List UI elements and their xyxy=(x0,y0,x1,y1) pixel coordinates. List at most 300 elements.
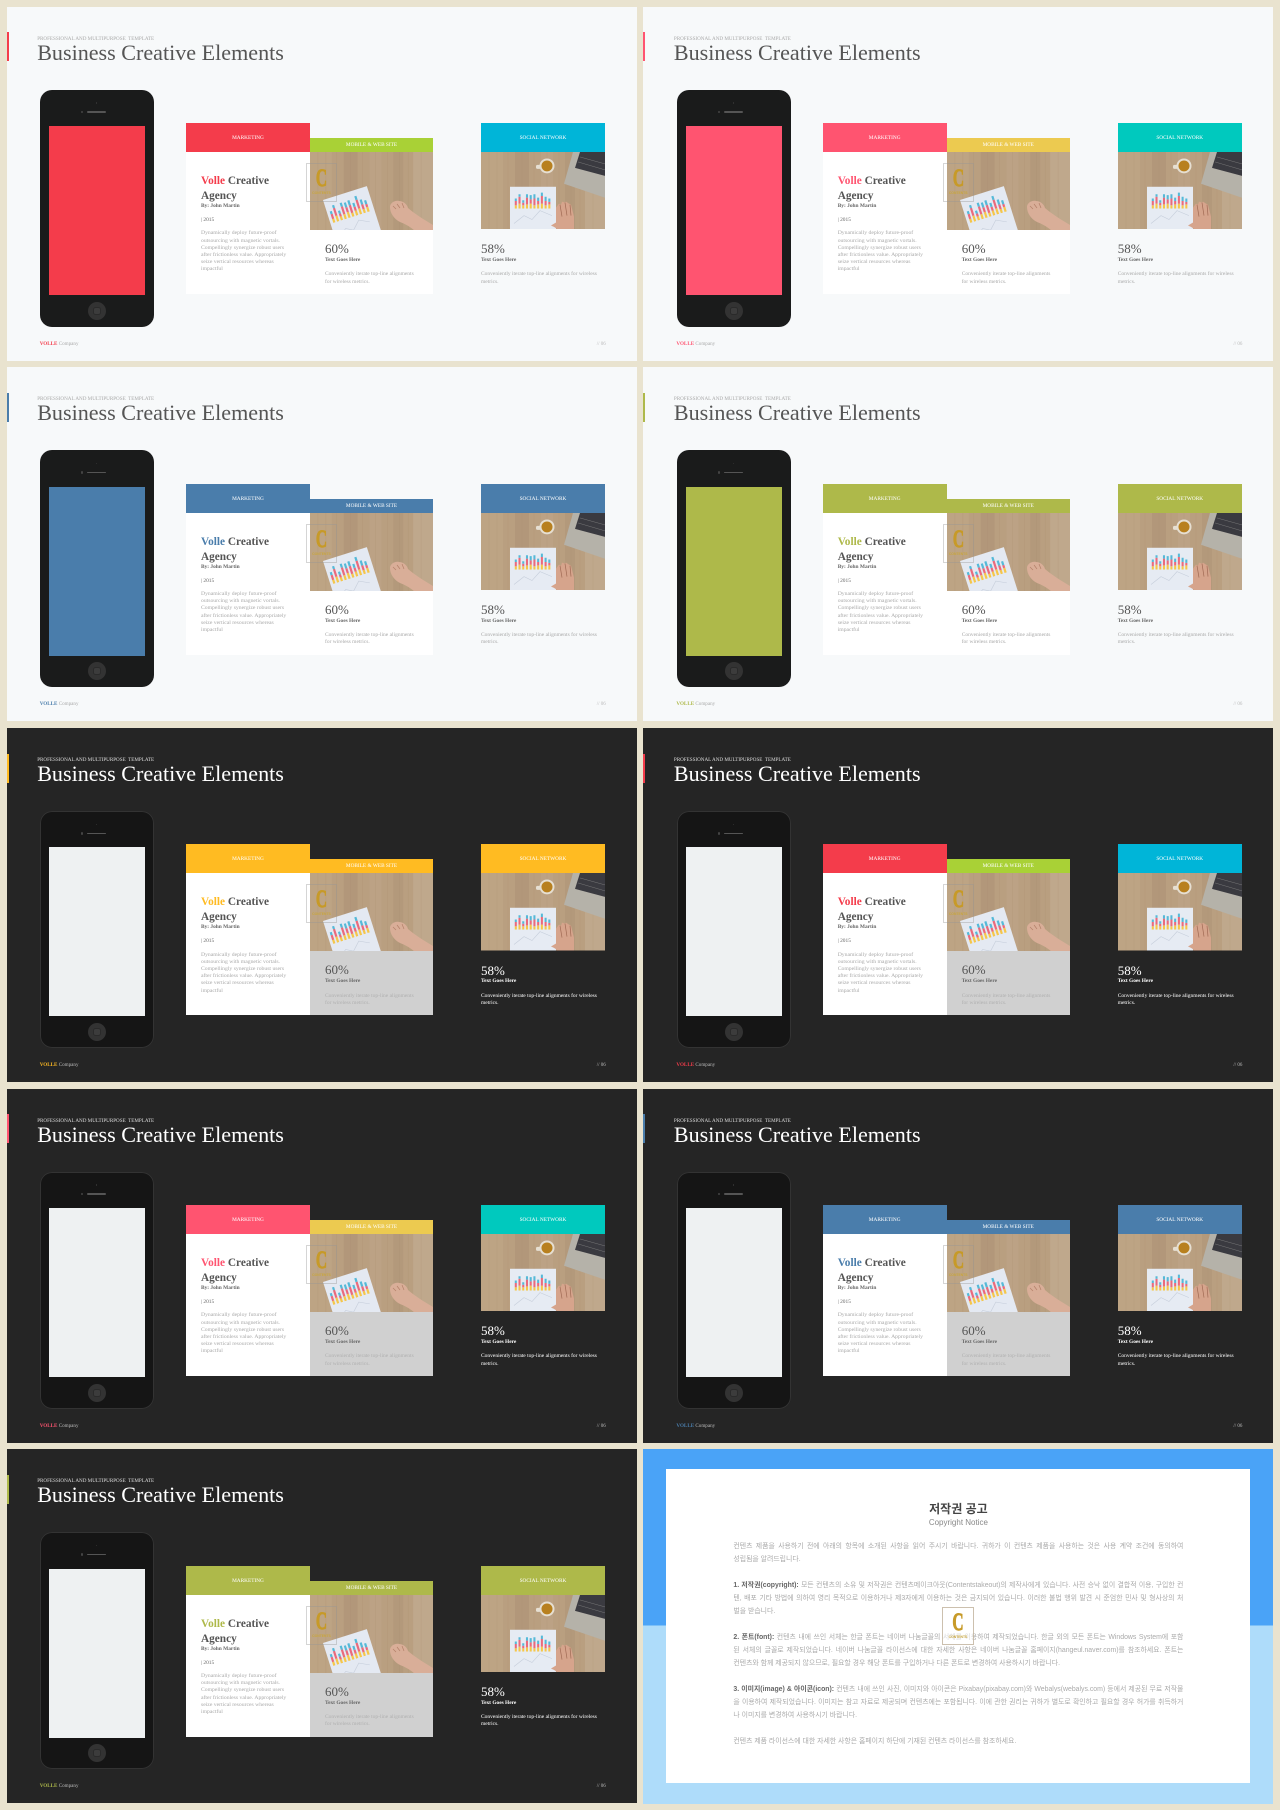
stat block xyxy=(947,951,1070,1015)
watermark logo: CONTENTS xyxy=(949,1635,967,1639)
body text: Dynamically deploy future-proof xyxy=(838,1312,913,1318)
card: social network xyxy=(481,484,605,645)
footer brand: VOLLE Company xyxy=(40,1423,79,1429)
accent bar xyxy=(7,1114,9,1143)
footer brand: VOLLE Company xyxy=(676,1423,715,1429)
panel: light slide pink xyxy=(643,7,1273,361)
photo: desk with chart xyxy=(310,873,433,951)
watermark logo: C xyxy=(953,165,964,192)
section 1: copyright: 텐, 배포 기타 방법에 의하여 영리 목적으로 이용하거나 제3자에게 이용하는 것은 금지되어 있습니다. 이러한 불법 행위 발견 시 준엄한 민사 및 형사상의 처 xyxy=(733,1595,1183,1602)
body text: after frictionless value. Appropriately xyxy=(838,613,923,619)
agency heading xyxy=(201,896,269,923)
accent bar xyxy=(7,393,9,422)
page number: // 06 xyxy=(597,1063,606,1068)
body text xyxy=(838,591,923,633)
card: agency and mobile xyxy=(823,844,1070,1015)
stat value: 60% xyxy=(962,1323,986,1338)
year: | 2015 xyxy=(838,1299,851,1305)
stat block xyxy=(310,591,433,655)
page number: // 06 xyxy=(1233,342,1242,347)
stat description: for wireless metrics. xyxy=(325,1721,370,1727)
tab: marketing xyxy=(823,844,947,873)
stat description: Conveniently iterate top-line alignments xyxy=(962,271,1050,277)
stat description: for wireless metrics. xyxy=(325,1000,370,1006)
watermark logo xyxy=(306,524,337,563)
body text xyxy=(201,591,286,633)
body text: after frictionless value. Appropriately xyxy=(838,973,923,979)
notice subtitle: Copyright Notice xyxy=(929,1518,988,1527)
stat description: for wireless metrics. xyxy=(962,1361,1006,1367)
stat value: 58% xyxy=(1118,1323,1142,1338)
body text: Compellingly synergize robust users xyxy=(201,245,284,251)
stat value: 58% xyxy=(481,241,505,256)
body text: after frictionless value. Appropriately xyxy=(201,252,286,258)
stat description xyxy=(481,1353,597,1368)
tab: social network: SOCIAL NETWORK xyxy=(1156,856,1203,862)
card: social network xyxy=(1118,123,1242,285)
tab: social network: SOCIAL NETWORK xyxy=(520,135,566,141)
heading: Business Creative Elements xyxy=(674,761,921,786)
tab: social network xyxy=(481,1566,605,1595)
watermark logo: CONTENTS xyxy=(312,552,331,556)
stat description xyxy=(481,993,597,1007)
stat description xyxy=(325,271,414,285)
stat value: 60% xyxy=(325,241,349,256)
watermark logo: CONTENTS xyxy=(312,912,331,916)
agency heading: Volle Creative xyxy=(201,1257,269,1269)
tab: social network xyxy=(481,123,605,152)
body text: impactful xyxy=(838,627,859,633)
photo: desk with chart xyxy=(310,152,433,230)
heading: Business Creative Elements xyxy=(37,400,284,425)
page number: // 06 xyxy=(597,702,606,707)
stat value: 58% xyxy=(1118,963,1142,978)
card background xyxy=(823,1234,1070,1376)
tab: social network xyxy=(1118,844,1242,873)
body text: Dynamically deploy future-proof xyxy=(838,230,913,236)
eyebrow text: PROFESSIONAL AND MULTIPURPOSE TEMPLATE xyxy=(37,1478,154,1484)
agency heading: Volle Creative xyxy=(201,896,269,908)
body text: seize vertical resources whereas xyxy=(838,620,910,626)
watermark logo: C xyxy=(953,886,964,913)
watermark logo xyxy=(943,1245,974,1284)
agency heading xyxy=(838,895,906,925)
tab: mobile and web site: MOBILE & WEB SITE xyxy=(983,863,1034,869)
card: social network xyxy=(481,1566,605,1731)
stat description: for wireless metrics. xyxy=(962,1000,1006,1006)
author: By: John Martin xyxy=(201,564,240,570)
page number: // 06 xyxy=(597,342,606,347)
panel: dark slide yellow xyxy=(7,728,637,1082)
body text: outsourcing with magnetic vortals. xyxy=(201,1320,280,1326)
phone mockup xyxy=(40,1532,154,1769)
panel: dark slide olive xyxy=(7,1449,637,1803)
stat description: Conveniently iterate top-line alignments xyxy=(325,1353,414,1359)
eyebrow text: PROFESSIONAL AND MULTIPURPOSE TEMPLATE xyxy=(674,1118,791,1124)
page number: // 06 xyxy=(1233,1063,1242,1068)
body text: outsourcing with magnetic vortals. xyxy=(838,598,917,604)
card: agency and mobile xyxy=(186,1566,433,1737)
watermark logo: CONTENTS xyxy=(312,1634,331,1638)
footer brand: VOLLE Company xyxy=(676,1062,715,1068)
stat description: Conveniently iterate top-line alignments xyxy=(325,271,414,277)
tab: social network xyxy=(481,484,605,513)
card: agency and mobile xyxy=(186,1205,433,1376)
body text: impactful xyxy=(201,627,223,633)
body text: seize vertical resources whereas xyxy=(838,1341,910,1347)
tab: marketing xyxy=(186,1566,310,1595)
footer brand: VOLLE Company xyxy=(676,701,715,707)
accent bar xyxy=(7,754,9,782)
author: By: John Martin xyxy=(838,564,876,570)
body text: seize vertical resources whereas xyxy=(201,259,274,265)
year: | 2015 xyxy=(201,1660,214,1666)
stat label: Text Goes Here xyxy=(325,1339,360,1345)
phone mockup xyxy=(677,811,791,1048)
tab: mobile and web site: MOBILE & WEB SITE xyxy=(346,503,397,509)
tab: marketing xyxy=(186,1205,310,1234)
card background xyxy=(823,513,1070,655)
author: By: John Martin xyxy=(201,1646,240,1652)
stat label: Text Goes Here xyxy=(962,618,997,624)
page number: // 06 xyxy=(1233,1424,1242,1429)
tab: marketing: MARKETING xyxy=(869,496,901,502)
tab: social network: SOCIAL NETWORK xyxy=(520,496,566,502)
agency heading: Agency xyxy=(201,190,237,202)
agency heading xyxy=(838,536,906,563)
year: | 2015 xyxy=(201,938,214,944)
tab: mobile and web site: MOBILE & WEB SITE xyxy=(346,1224,397,1230)
agency heading: Agency xyxy=(201,911,237,923)
accent bar xyxy=(7,32,9,61)
stat label: Text Goes Here xyxy=(481,1339,516,1345)
body text xyxy=(201,1312,286,1355)
stat block xyxy=(947,1312,1070,1376)
card: social network xyxy=(1118,844,1242,1009)
year: | 2015 xyxy=(838,217,851,223)
body text: Compellingly synergize robust users xyxy=(838,966,921,972)
panel: dark slide red xyxy=(643,728,1273,1082)
card: agency and mobile xyxy=(823,123,1070,285)
eyebrow text: PROFESSIONAL AND MULTIPURPOSE TEMPLATE xyxy=(674,757,791,763)
stat value: 58% xyxy=(1118,602,1142,617)
agency heading: Agency xyxy=(838,190,873,202)
body text: Dynamically deploy future-proof xyxy=(201,591,276,597)
body text: Dynamically deploy future-proof xyxy=(201,952,276,958)
agency heading: Agency xyxy=(201,1633,237,1645)
footer brand: VOLLE Company xyxy=(40,701,79,707)
body text: impactful xyxy=(201,988,223,994)
body text: seize vertical resources whereas xyxy=(838,980,910,986)
watermark logo: C xyxy=(953,526,964,553)
heading: Business Creative Elements xyxy=(37,761,284,786)
stat label: Text Goes Here xyxy=(962,1339,997,1345)
stat description: for wireless metrics. xyxy=(962,639,1006,645)
tab: mobile and web site: MOBILE & WEB SITE xyxy=(346,863,397,869)
photo: desk with laptop xyxy=(1118,513,1242,590)
stat label: Text Goes Here xyxy=(325,618,360,624)
stat description: Conveniently iterate top-line alignments for wireless xyxy=(1118,993,1234,999)
watermark logo: C xyxy=(952,1609,964,1636)
body text: outsourcing with magnetic vortals. xyxy=(838,1320,917,1326)
accent bar xyxy=(643,1114,645,1143)
stat label: Text Goes Here xyxy=(962,257,997,263)
stat label: Text Goes Here xyxy=(1118,257,1153,263)
stat description xyxy=(325,632,414,645)
photo: desk with laptop xyxy=(1118,152,1242,229)
tab: social network xyxy=(1118,1205,1242,1234)
body text: Compellingly synergize robust users xyxy=(201,605,284,611)
stat description xyxy=(962,632,1050,645)
eyebrow text: PROFESSIONAL AND MULTIPURPOSE TEMPLATE xyxy=(37,396,154,402)
watermark logo: C xyxy=(316,1608,327,1635)
stat value: 60% xyxy=(962,602,986,617)
card: social network xyxy=(481,844,605,1009)
stat description: for wireless metrics. xyxy=(325,1361,370,1367)
tab: mobile and web site xyxy=(947,859,1070,873)
photo: desk with laptop xyxy=(481,873,605,951)
stat value: 60% xyxy=(325,602,349,617)
agency heading: Volle Creative xyxy=(201,175,269,187)
stat description: Conveniently iterate top-line alignments xyxy=(325,632,414,638)
watermark logo xyxy=(306,163,337,202)
stat description: Conveniently iterate top-line alignments xyxy=(962,632,1050,638)
watermark logo xyxy=(306,1606,337,1645)
stat description: for wireless metrics. xyxy=(325,279,370,285)
stat description xyxy=(1118,632,1234,645)
body text: seize vertical resources whereas xyxy=(201,1341,274,1347)
photo: desk with laptop xyxy=(1118,1234,1242,1311)
stat label: Text Goes Here xyxy=(1118,618,1153,624)
notice title: 저작권 공고 xyxy=(929,1502,988,1516)
stat description: Conveniently iterate top-line alignments for wireless xyxy=(1118,271,1234,277)
stat description: metrics. xyxy=(481,1361,499,1367)
panel: dark slide pink xyxy=(7,1089,637,1443)
card background xyxy=(186,1595,433,1737)
photo: desk with chart xyxy=(947,873,1070,951)
stat label: Text Goes Here xyxy=(1118,1339,1153,1345)
phone mockup xyxy=(677,1172,791,1409)
body text: outsourcing with magnetic vortals. xyxy=(201,238,280,244)
stat description: metrics. xyxy=(481,639,499,645)
stat description xyxy=(1118,271,1234,285)
stat description xyxy=(1118,993,1234,1007)
photo: desk with laptop xyxy=(1118,873,1242,951)
author: By: John Martin xyxy=(838,203,876,209)
card background xyxy=(186,513,433,655)
photo: desk with chart xyxy=(947,1234,1070,1312)
body text: seize vertical resources whereas xyxy=(838,259,910,265)
stat description xyxy=(481,632,597,645)
watermark logo: CONTENTS xyxy=(312,1273,331,1277)
body text: after frictionless value. Appropriately xyxy=(838,1334,923,1340)
body text: Compellingly synergize robust users xyxy=(838,1327,921,1333)
heading: Business Creative Elements xyxy=(674,40,921,65)
body text: after frictionless value. Appropriately xyxy=(201,613,286,619)
body text xyxy=(201,952,286,995)
body text: impactful xyxy=(838,266,859,272)
body text: outsourcing with magnetic vortals. xyxy=(838,238,917,244)
stat block xyxy=(947,230,1070,294)
tab: mobile and web site: MOBILE & WEB SITE xyxy=(983,142,1034,148)
watermark logo xyxy=(943,524,974,563)
stat description: metrics. xyxy=(481,279,499,285)
year: | 2015 xyxy=(838,578,851,584)
agency heading xyxy=(201,1256,269,1286)
body text: Compellingly synergize robust users xyxy=(838,245,921,251)
stat value: 58% xyxy=(481,1323,505,1338)
stat description: Conveniently iterate top-line alignments for wireless xyxy=(481,993,597,999)
photo: desk with laptop xyxy=(481,513,605,590)
tab: mobile and web site: MOBILE & WEB SITE xyxy=(983,503,1034,509)
agency heading: Volle Creative xyxy=(201,536,269,548)
body text: outsourcing with magnetic vortals. xyxy=(201,598,280,604)
stat description: metrics. xyxy=(481,1000,499,1006)
body text: Compellingly synergize robust users xyxy=(201,966,284,972)
intro text: 성립됨을 알려드립니다. xyxy=(733,1556,801,1563)
stat description: Conveniently iterate top-line alignments xyxy=(962,1353,1050,1359)
tab: social network: SOCIAL NETWORK xyxy=(520,856,566,862)
author: By: John Martin xyxy=(838,924,876,930)
section 3: images and icons: 을 이용하여 제작되었습니다. 이미지는 참고 자료로 제공되며 컨텐츠에는 포함됩니다. 이에 관한 권리는 귀하가 별도로 확인하고 필요할 경우 허가를 취득하거 xyxy=(733,1699,1183,1706)
tab: marketing: MARKETING xyxy=(869,135,901,141)
agency heading: Volle Creative xyxy=(838,1257,906,1269)
year: | 2015 xyxy=(201,578,214,584)
accent bar xyxy=(7,1475,9,1504)
footer brand: VOLLE Company xyxy=(40,1783,79,1789)
tab: mobile and web site: MOBILE & WEB SITE xyxy=(346,142,397,148)
body text: after frictionless value. Appropriately xyxy=(838,252,923,258)
stat label: Text Goes Here xyxy=(481,618,516,624)
body text: Compellingly synergize robust users xyxy=(201,1327,284,1333)
stat description: for wireless metrics. xyxy=(325,639,370,645)
stat description: for wireless metrics. xyxy=(962,279,1006,285)
stat value: 60% xyxy=(962,241,986,256)
page number: // 06 xyxy=(597,1424,606,1429)
watermark logo: C xyxy=(316,165,327,192)
body text: seize vertical resources whereas xyxy=(201,620,274,626)
body text: outsourcing with magnetic vortals. xyxy=(201,1680,280,1686)
tab: social network: SOCIAL NETWORK xyxy=(1156,135,1203,141)
body text: seize vertical resources whereas xyxy=(201,1702,274,1708)
photo: desk with laptop xyxy=(481,152,605,229)
agency heading: Agency xyxy=(201,1272,237,1284)
heading: Business Creative Elements xyxy=(674,400,921,425)
body text: impactful xyxy=(838,1348,859,1354)
stat block xyxy=(310,951,433,1015)
stat description xyxy=(962,1353,1050,1368)
body text: seize vertical resources whereas xyxy=(201,980,274,986)
stat description xyxy=(325,1714,414,1728)
stat description xyxy=(962,271,1050,285)
stat value: 58% xyxy=(1118,241,1142,256)
eyebrow text: PROFESSIONAL AND MULTIPURPOSE TEMPLATE xyxy=(674,36,791,42)
tab: mobile and web site xyxy=(310,499,433,513)
watermark logo: CONTENTS xyxy=(949,552,968,556)
stat value: 60% xyxy=(325,1323,349,1338)
heading: Business Creative Elements xyxy=(37,1122,284,1147)
body text: after frictionless value. Appropriately xyxy=(201,1695,286,1701)
body text: Compellingly synergize robust users xyxy=(201,1687,284,1693)
stat value: 58% xyxy=(481,1684,505,1699)
tab: mobile and web site xyxy=(947,499,1070,513)
watermark logo: CONTENTS xyxy=(949,191,968,195)
tab: social network xyxy=(1118,123,1242,152)
tab: marketing: MARKETING xyxy=(869,856,901,862)
tab: social network: SOCIAL NETWORK xyxy=(1156,496,1203,502)
tab: social network: SOCIAL NETWORK xyxy=(520,1217,566,1223)
body text: impactful xyxy=(201,266,223,272)
tab: marketing: MARKETING xyxy=(232,856,264,862)
stat value: 58% xyxy=(481,963,505,978)
stat description: Conveniently iterate top-line alignments for wireless xyxy=(481,1714,597,1720)
section 1: copyright: 1. 저작권(copyright): 모든 컨텐츠의 소유 및 저작권은 컨텐츠메이크아웃(Contentstakeout)의 제작사에게 있습니다. 사전 승낙 없이 결합적 이용, 구입한 컨 xyxy=(733,1582,1183,1589)
agency heading: Agency xyxy=(838,551,873,563)
accent bar xyxy=(643,393,645,422)
watermark logo: C xyxy=(316,886,327,913)
stat description: Conveniently iterate top-line alignments for wireless xyxy=(481,271,597,277)
agency heading xyxy=(201,536,269,563)
stat description: Conveniently iterate top-line alignments for wireless xyxy=(1118,632,1234,638)
stat description: metrics. xyxy=(1118,1361,1135,1367)
footer brand: VOLLE Company xyxy=(40,1062,79,1068)
body text xyxy=(838,952,923,995)
body text: impactful xyxy=(838,988,859,994)
body text: Dynamically deploy future-proof xyxy=(838,952,913,958)
body text: Dynamically deploy future-proof xyxy=(201,1312,276,1318)
watermark logo xyxy=(943,163,974,202)
card background xyxy=(186,873,433,1015)
author: By: John Martin xyxy=(838,1285,876,1291)
stat description xyxy=(481,271,597,285)
stat description: metrics. xyxy=(1118,279,1135,285)
tab: mobile and web site xyxy=(310,1581,433,1595)
phone mockup xyxy=(677,450,791,687)
tab: marketing: MARKETING xyxy=(869,1217,901,1223)
eyebrow text: PROFESSIONAL AND MULTIPURPOSE TEMPLATE xyxy=(37,1118,154,1124)
tab: mobile and web site xyxy=(947,1220,1070,1234)
body text xyxy=(201,230,286,272)
tab: social network: SOCIAL NETWORK xyxy=(1156,1217,1203,1223)
photo: desk with laptop xyxy=(481,1595,605,1672)
tab: marketing: MARKETING xyxy=(232,496,264,502)
tab: social network: SOCIAL NETWORK xyxy=(520,1578,566,1584)
card background xyxy=(823,152,1070,294)
body text: Dynamically deploy future-proof xyxy=(201,230,276,236)
stat description: Conveniently iterate top-line alignments for wireless xyxy=(481,1353,597,1359)
body text xyxy=(838,1312,923,1355)
tab: marketing xyxy=(823,1205,947,1234)
footer brand: VOLLE Company xyxy=(40,341,79,347)
agency heading: Volle Creative xyxy=(838,896,906,908)
stat description: metrics. xyxy=(1118,639,1135,645)
card background xyxy=(186,1234,433,1376)
stat description xyxy=(962,993,1050,1007)
year: | 2015 xyxy=(201,217,214,223)
body text xyxy=(201,1673,286,1716)
body text xyxy=(838,230,923,272)
photo: desk with chart xyxy=(947,513,1070,591)
stat description: Conveniently iterate top-line alignments xyxy=(325,1714,414,1720)
tab: marketing xyxy=(823,123,947,152)
stat value: 60% xyxy=(325,962,349,977)
tab: mobile and web site xyxy=(310,859,433,873)
eyebrow text: PROFESSIONAL AND MULTIPURPOSE TEMPLATE xyxy=(37,757,154,763)
watermark logo: C xyxy=(953,1247,964,1274)
panel: dark slide blue xyxy=(643,1089,1273,1443)
stat label: Text Goes Here xyxy=(325,257,360,263)
card: agency and mobile xyxy=(186,123,433,285)
